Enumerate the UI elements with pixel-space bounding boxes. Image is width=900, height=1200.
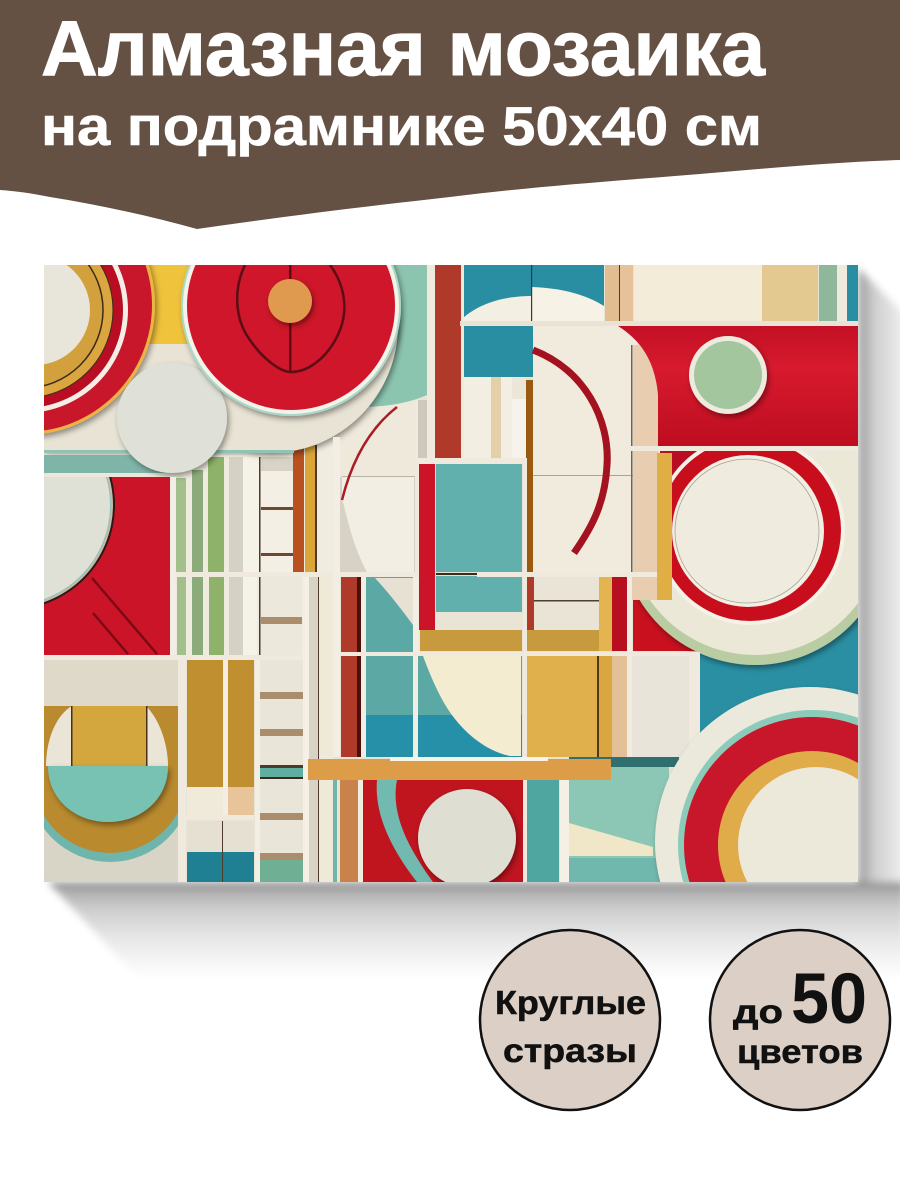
panel: centre right cells [527,577,700,757]
artwork: geometric mosaic picture [44,265,858,882]
white post [170,477,176,660]
teal edge strip [44,450,294,453]
pale circle [117,363,227,473]
panel: peach column [633,345,658,577]
badge: round rhinestones: стразы [503,1032,637,1069]
cream curved shape [423,656,521,756]
panel: bottom teal and wedge [569,757,679,882]
badge: up to 50 colours: цветов [737,1033,863,1070]
header banner [0,0,900,229]
big red circle [180,265,406,422]
panel: red block with circle [44,477,170,655]
panel: stripes lower row [176,577,303,655]
cream line [44,473,183,477]
panel: red and teal columns [341,577,522,757]
horizontal shelf [44,655,308,660]
panel: stripes upper row [176,442,333,572]
yellow block [148,265,189,344]
title: Алмазная мозаика [41,4,766,92]
badge: up to 50 colours: до [733,993,783,1030]
horizontal shelf [340,572,415,573]
long shelf [340,652,700,656]
orange band [308,759,611,780]
red block [633,600,700,651]
white posts [303,577,309,882]
teal field [700,617,858,733]
ochre bar [657,453,672,600]
mint panel [368,265,427,407]
panel: ladder cells [260,692,303,882]
canvas shadow [48,268,900,978]
red panel with green circle [618,326,858,446]
panel: narrow cream column [309,437,340,882]
ledge [625,446,858,451]
white strip [390,757,548,761]
subtitle: на подрамнике 50х40 см [41,95,762,157]
icon: large ring disc right [636,451,858,671]
long shelf [477,572,657,577]
teal corner [835,450,858,490]
cream disc [44,307,404,460]
badge: round rhinestones [480,930,660,1110]
icon: concentric rings top left [44,265,160,440]
panel: cream with red arc [532,345,633,572]
badge: round rhinestones: Круглые [495,984,646,1021]
post [178,660,186,882]
post [255,660,260,882]
badge: up to 50 colours: 50 [791,960,867,1039]
panel: left bottom medallion [44,660,178,882]
panel: teal box [419,458,527,651]
icon: big ring circle bottom right [655,687,900,997]
badge: up to 50 colours [710,930,890,1110]
panel: centre stack [415,265,858,578]
panel: central white curved panel [340,400,416,573]
panel: ochre columns [187,660,254,882]
teal band [44,455,178,473]
panel: red with pale circle [333,780,569,887]
